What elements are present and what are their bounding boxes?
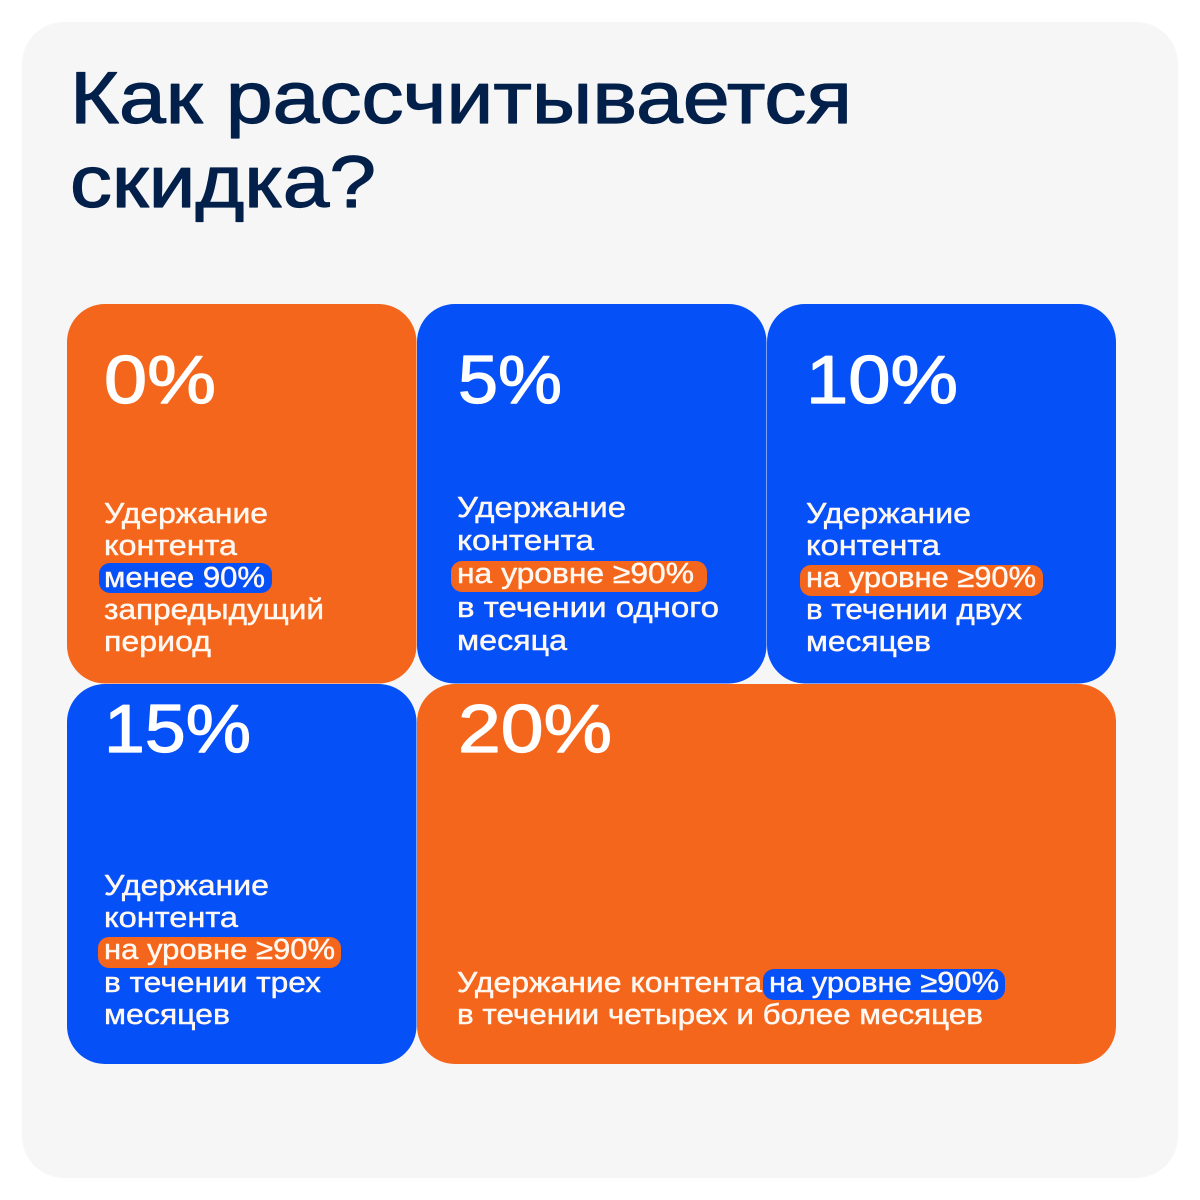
description: 20%: Удержание контента [457, 967, 763, 999]
highlight: на уровне 90% [98, 937, 341, 968]
percent: 15%: 15% [104, 691, 251, 767]
description: 0% [104, 498, 324, 658]
panel: 0% [67, 304, 416, 684]
percent: 20%: 20% [458, 691, 612, 767]
description: 0%: период [104, 626, 211, 658]
description: 5% [457, 492, 719, 657]
description: 15%: на уровне ≥90% [104, 934, 335, 966]
description: 5%: на уровне ≥90% [457, 558, 694, 590]
highlight: на уровне 90% [763, 969, 1005, 1000]
description: 10%: на уровне ≥90% [806, 562, 1036, 594]
title: Как рассчитывается [70, 58, 852, 139]
percent: 10%: 10% [806, 342, 958, 418]
description: 0%: Удержание [104, 498, 268, 530]
description: 20%: на уровне ≥90% [769, 967, 999, 999]
description: 10%: в течении двух [806, 594, 1023, 626]
description: 10%: контента [806, 530, 941, 562]
highlight: на уровне 90% [800, 565, 1043, 596]
description: 10% [806, 498, 1036, 658]
panel: 20% [417, 684, 1116, 1064]
title: скидка? [70, 142, 376, 223]
description: 5%: месяца [457, 625, 568, 657]
description: 20%: в течении четырех и более месяцев [457, 999, 983, 1031]
description: 15%: в течении трех [104, 967, 322, 999]
description: 20% [457, 967, 999, 1031]
percent: 5%: 5% [458, 342, 562, 418]
description: 10%: месяцев [806, 626, 931, 658]
panel: 15% [67, 684, 416, 1064]
description: 15% [104, 870, 335, 1031]
description: 5%: в течении одного [457, 592, 719, 624]
panel: 10% [767, 304, 1116, 684]
description: 0%: запредыдущий [104, 594, 324, 626]
description: 0%: менее 90% [104, 562, 265, 594]
highlight: менее 90% [99, 563, 272, 593]
percent: 0%: 0% [104, 342, 216, 418]
panel: 5% [417, 304, 766, 684]
description: 10%: Удержание [806, 498, 971, 530]
description: 15%: Удержание [104, 870, 269, 902]
highlight: на уровне 90% [451, 561, 707, 592]
description: 5%: контента [457, 525, 595, 557]
description: 5%: Удержание [457, 492, 626, 524]
description: 15%: контента [104, 902, 239, 934]
title [70, 58, 852, 223]
description: 15%: месяцев [104, 999, 230, 1031]
description: 0%: контента [104, 530, 238, 562]
